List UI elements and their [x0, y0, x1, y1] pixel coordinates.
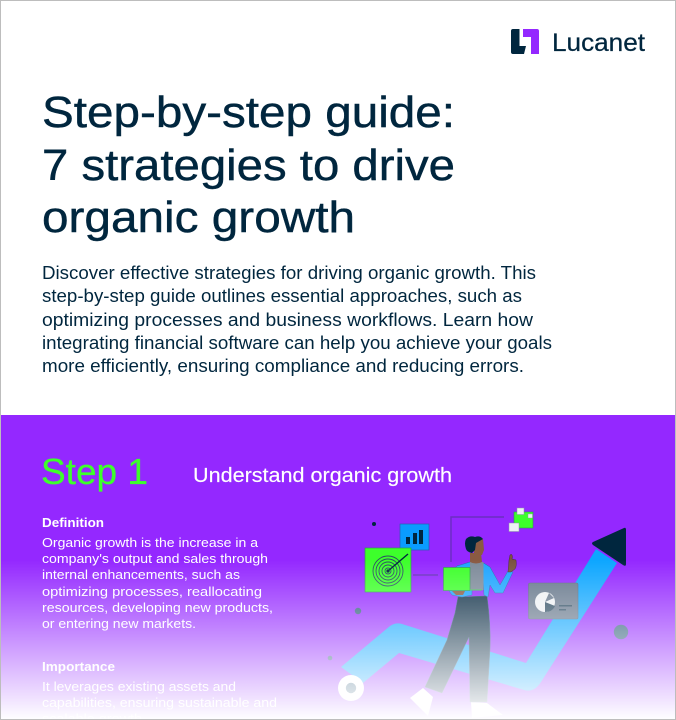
panel: step 1	[0, 415, 676, 720]
icon: target tile	[365, 548, 411, 592]
icon: logo mark	[511, 29, 539, 54]
decorative dots	[328, 522, 628, 701]
title	[42, 88, 455, 242]
intro paragraph: Discover effective strategies for driving organic growth. This	[42, 263, 536, 283]
intro paragraph: step-by-step guide outlines essential approaches, such as	[42, 286, 522, 306]
holding hand	[452, 591, 465, 595]
panel background	[0, 415, 676, 720]
intro paragraph	[42, 263, 552, 376]
definition text block	[42, 515, 273, 631]
connector lines	[413, 517, 504, 575]
icon: green squares top right	[509, 508, 533, 532]
title: 7 strategies to drive	[42, 141, 455, 190]
growth arrow band	[341, 549, 617, 691]
left jacket	[449, 562, 472, 597]
title: Step-by-step guide:	[42, 88, 455, 137]
definition text block: or entering new markets.	[42, 616, 196, 631]
importance text block: It leverages existing assets and	[42, 679, 236, 694]
definition text block: company's output and sales through	[42, 551, 268, 566]
definition text block: optimizing processes, reallocating	[42, 584, 262, 599]
definition text block: internal enhancements, such as	[42, 567, 241, 582]
intro paragraph: more efficiently, ensuring compliance and reducing errors.	[42, 356, 524, 376]
hair	[465, 536, 483, 553]
title: organic growth	[42, 193, 355, 242]
importance text block: Importance	[42, 659, 115, 674]
trousers	[425, 596, 490, 702]
definition text block: Organic growth is the increase in a	[42, 535, 259, 550]
hand thumb up	[508, 554, 516, 572]
right arm and jacket side	[482, 562, 513, 597]
definition text block: resources, developing new products,	[42, 600, 273, 615]
intro paragraph: optimizing processes and business workflows. Learn how	[42, 310, 534, 330]
icon: bar chart tile	[400, 524, 429, 550]
logo wordmark: Lucanet	[552, 29, 645, 57]
definition text block: Definition	[42, 515, 104, 530]
importance text block: capabilities, ensuring sustainable and	[42, 695, 277, 710]
logo: Lucanet	[511, 29, 645, 57]
laptop	[444, 568, 470, 590]
importance text block	[42, 659, 277, 720]
card: pie chart	[528, 583, 578, 619]
step heading: Understand organic growth	[193, 465, 452, 487]
grey top	[470, 562, 484, 590]
step number: Step 1	[41, 451, 148, 492]
neck and face	[470, 553, 482, 564]
shoes	[410, 688, 433, 716]
person figure	[410, 536, 516, 718]
illustration: growth arrow with person	[328, 508, 628, 718]
arrow head	[592, 528, 626, 566]
intro paragraph: integrating financial software can help you achieve your goals	[42, 333, 552, 353]
